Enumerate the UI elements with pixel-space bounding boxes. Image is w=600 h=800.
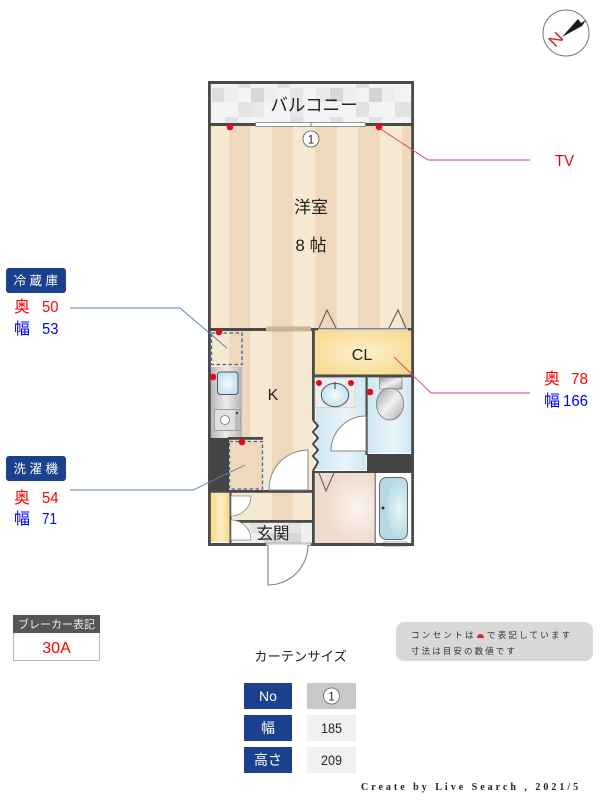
entrance hall floor — [230, 492, 312, 521]
fridge label: 冷蔵庫 — [13, 274, 62, 288]
closet dimensions: 78 — [571, 371, 588, 388]
dark pillar left — [209, 437, 229, 491]
toilet room — [368, 377, 412, 453]
icon: compass: N — [545, 28, 567, 51]
window — [256, 122, 366, 127]
closet dimensions — [544, 370, 588, 410]
washer label: 洗濯機 — [13, 462, 62, 476]
kitchen door — [269, 450, 308, 490]
curtain size table: 高さ — [254, 752, 282, 768]
curtain size title: カーテンサイズ — [254, 649, 347, 664]
wash basin — [315, 378, 355, 408]
note box: コンセントは — [411, 630, 476, 640]
fridge dimensions — [14, 298, 59, 338]
label: 8 tatami: 8 帖 — [295, 236, 327, 255]
note box: で表記しています — [487, 630, 572, 640]
label: western room: 洋室 — [294, 198, 328, 217]
curtain size table: 1 — [328, 692, 335, 704]
washroom door — [331, 416, 366, 451]
washer space — [230, 442, 262, 489]
washer dimensions: 幅 — [14, 510, 30, 528]
leader: TV — [379, 128, 530, 160]
kitchen counter — [210, 367, 242, 438]
curtain size table: 幅 — [261, 720, 275, 736]
leader: washer — [70, 465, 245, 490]
label: TV: TV — [555, 153, 574, 170]
shoe closet — [210, 493, 230, 542]
dark shaft — [367, 454, 413, 473]
toilet — [376, 378, 404, 420]
dressing room door mark — [319, 473, 334, 491]
bath room — [376, 474, 412, 546]
washroom — [316, 377, 366, 470]
label: K: K — [268, 387, 279, 404]
curtain size table: 185 — [321, 720, 342, 736]
balcony — [210, 82, 412, 124]
washer dimensions: 奥 — [14, 489, 30, 507]
leader: fridge — [70, 308, 227, 348]
kitchen floor — [210, 330, 314, 492]
fridge space — [212, 333, 242, 364]
front door — [266, 543, 311, 585]
closet dimensions: 166 — [563, 393, 588, 410]
fridge dimensions: 奥 — [14, 298, 30, 316]
washer dimensions: 54 — [42, 490, 59, 507]
washer label — [6, 456, 66, 481]
leader: closet — [394, 357, 530, 393]
label: balcony: バルコニー — [270, 95, 358, 115]
shoe closet doors — [231, 496, 251, 540]
icon: compass — [543, 10, 589, 56]
breaker panel — [13, 615, 100, 660]
note box — [396, 622, 593, 661]
fridge dimensions: 50 — [42, 299, 59, 316]
closet dimensions: 奥 — [544, 370, 560, 388]
sliding door kitchen — [266, 326, 311, 332]
zigzag partition — [313, 420, 318, 471]
note box: 寸法は目安の数値です — [411, 646, 517, 656]
outlets — [210, 124, 382, 445]
western room floor — [210, 125, 412, 328]
label: entrance: 玄関 — [256, 524, 290, 543]
washer dimensions: 71 — [42, 511, 57, 528]
fridge label — [6, 268, 66, 293]
fridge dimensions: 幅 — [14, 320, 30, 338]
closet dimensions: 幅 — [544, 392, 560, 410]
curtain marker 1: 1 — [308, 134, 314, 146]
breaker panel: 30A — [42, 640, 71, 657]
credit: Create by Live Search , 2021/5 — [361, 782, 581, 793]
curtain marker 1 — [303, 131, 319, 147]
walls — [208, 81, 414, 546]
entrance tiles — [232, 522, 312, 543]
washer dimensions — [14, 489, 59, 528]
closet CL — [314, 331, 412, 375]
curtain size table: No — [259, 688, 277, 704]
floor plan — [208, 81, 414, 585]
fridge dimensions: 53 — [42, 321, 59, 338]
curtain size table — [244, 683, 356, 773]
label: CL: CL — [352, 347, 372, 364]
dressing room — [315, 473, 375, 543]
curtain size table: 209 — [321, 752, 342, 768]
breaker panel: ブレーカー表記 — [18, 617, 95, 631]
closet doors — [318, 310, 408, 330]
